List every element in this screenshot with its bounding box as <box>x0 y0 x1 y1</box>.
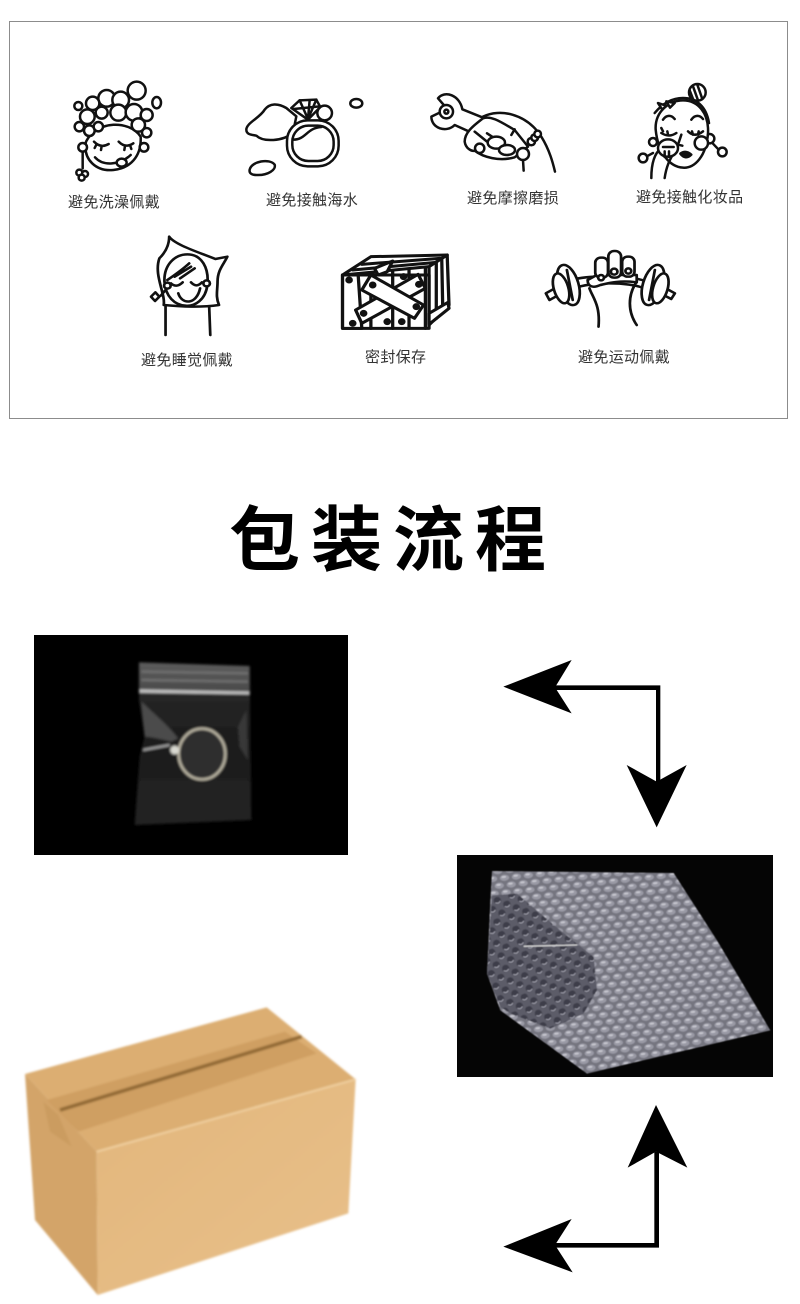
icon: woman applying cosmetics <box>637 82 728 180</box>
icon: ring and sea water <box>245 98 364 176</box>
label: avoid wearing during sport: 避免运动佩戴 <box>578 349 670 366</box>
photo: ring in zip bag <box>34 635 348 855</box>
icon: sealed wooden crate <box>340 253 451 330</box>
label: avoid cosmetics: 避免接触化妆品 <box>636 189 743 206</box>
arrow: bag to bubble wrap <box>504 660 687 828</box>
label: avoid abrasion: 避免摩擦磨损 <box>467 190 559 207</box>
photo: bubble wrap <box>457 855 773 1077</box>
label: avoid sea water: 避免接触海水 <box>266 192 358 209</box>
title: 包装流程 <box>229 502 557 581</box>
icon: bubbles on curly head <box>73 80 162 182</box>
photo: cardboard box <box>24 1006 357 1296</box>
panel: care instructions <box>9 21 788 419</box>
icon: hand lifting dumbbell <box>544 250 676 328</box>
label: keep sealed: 密封保存 <box>365 349 426 366</box>
icon: hand with wrench <box>430 93 556 173</box>
icon: sleeping girl on pillow <box>150 235 229 336</box>
arrow: bubble wrap to box <box>504 1105 688 1272</box>
label: avoid wearing while sleeping: 避免睡觉佩戴 <box>141 352 233 369</box>
label: avoid bathing: 避免洗澡佩戴 <box>68 194 160 211</box>
